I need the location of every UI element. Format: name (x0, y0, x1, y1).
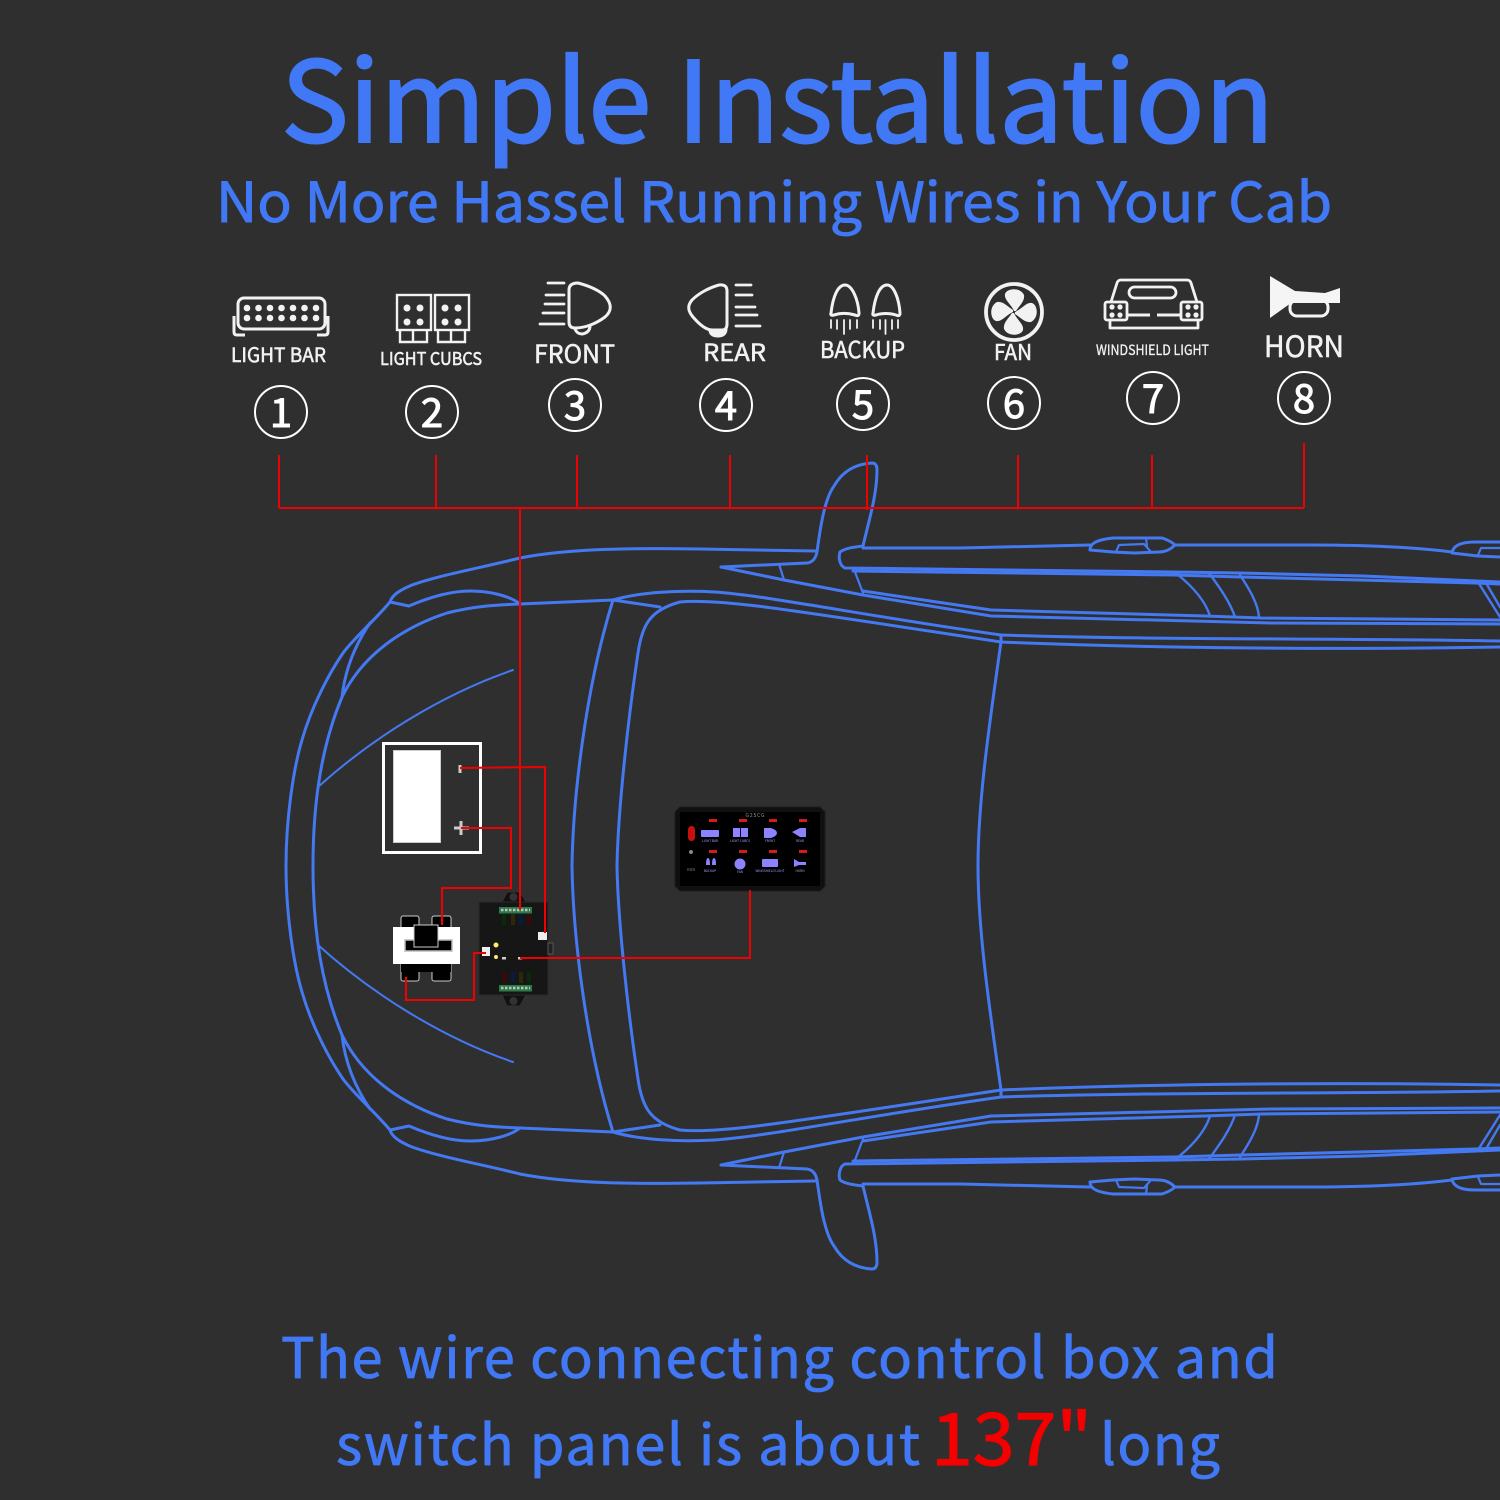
number 1: 1 (270, 381, 292, 439)
label: light cubes: LIGHT CUBCS (380, 345, 482, 371)
icon: backup lights (831, 285, 900, 334)
caption line 1: The wire connecting control box and (281, 1314, 1278, 1395)
car outline (286, 463, 1500, 1269)
label: rear: REAR (703, 333, 766, 368)
switch panel: FAN (737, 869, 743, 874)
switch panel: LIGHT CUBCS (730, 838, 750, 843)
icon: light bar (234, 298, 328, 335)
number 4 (700, 374, 752, 432)
battery (384, 744, 480, 852)
number 2 (406, 381, 458, 439)
number 1 (255, 381, 307, 439)
label: windshield light: WINDSHIELD LIGHT (1096, 340, 1209, 360)
switch panel: HORN (795, 868, 805, 873)
label: light bar: LIGHT BAR (231, 339, 326, 368)
label: front: FRONT (534, 335, 615, 371)
subtitle: No More Hassel Running Wires in Your Cab (216, 158, 1332, 238)
number 2: 2 (421, 381, 443, 439)
switch panel (675, 807, 825, 891)
number 4: 4 (715, 374, 737, 432)
icon: horn (1270, 276, 1340, 318)
highlighted length: 137" (931, 1381, 1092, 1486)
number 7 (1127, 367, 1179, 425)
caption line 2 end: long (1100, 1401, 1220, 1482)
title: Simple Installation (281, 13, 1274, 175)
switch panel: WINDSHIELD LIGHT (756, 868, 785, 873)
caption (281, 1314, 1278, 1486)
switch panel: LIGHT BAR (702, 838, 718, 843)
label: fan: FAN (994, 335, 1032, 367)
number 5 (837, 373, 889, 431)
caption line 2: switch panel is about (336, 1401, 920, 1482)
number 7: 7 (1142, 367, 1164, 425)
switch panel: REAR (796, 838, 804, 843)
control box (479, 892, 553, 1006)
icon: windshield light (1105, 280, 1202, 328)
icon: front light (540, 283, 610, 334)
switch panel: RGB (687, 867, 695, 873)
switch panel: FRONT (765, 838, 775, 843)
number 6: 6 (1003, 372, 1025, 430)
number 8: 8 (1293, 367, 1315, 425)
switch panel: BACKUP (704, 868, 716, 873)
icon row (231, 276, 1344, 439)
number 3 (549, 374, 601, 432)
label: horn: HORN (1264, 324, 1344, 366)
switch panel: G25CG (746, 812, 765, 819)
number 5: 5 (852, 373, 874, 431)
number 8 (1278, 367, 1330, 425)
icon: fan (986, 284, 1042, 340)
label: backup: BACKUP (820, 331, 905, 365)
number 3: 3 (564, 374, 586, 432)
number 6 (988, 372, 1040, 430)
icon: light cubes (397, 295, 469, 342)
relay (393, 916, 460, 981)
icon: rear light (689, 285, 760, 336)
red wiring (279, 443, 1304, 1000)
